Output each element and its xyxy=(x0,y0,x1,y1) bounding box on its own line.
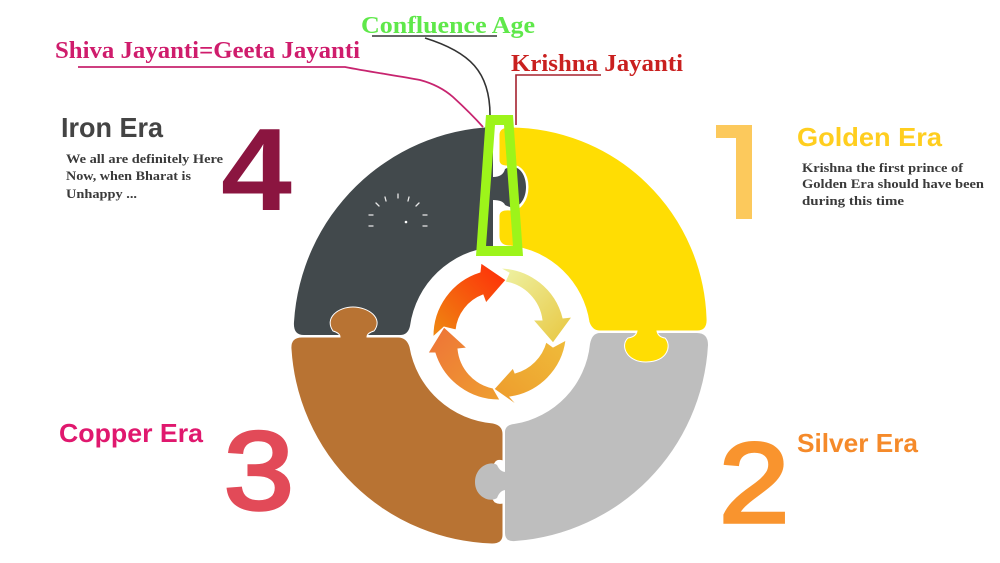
puzzle piece: Silver Era grey segment xyxy=(505,333,708,541)
text: Iron Era description xyxy=(66,151,223,201)
arrow: amber xyxy=(494,340,566,406)
arrow: pale yellow xyxy=(500,268,572,343)
heading: Golden Era: Golden Era xyxy=(797,122,943,152)
text: Golden Era description: Krishna the first prince of xyxy=(802,160,964,175)
text: Iron Era description: Now, when Bharat is xyxy=(66,168,191,183)
heading: Silver Era: Silver Era xyxy=(797,428,919,458)
leader line: Shiva Jayanti xyxy=(78,67,483,127)
number 1 xyxy=(716,125,752,219)
puzzle piece: Copper Era brown segment xyxy=(291,307,503,544)
label: Confluence Age: Confluence Age xyxy=(361,13,535,39)
number 4: 4 xyxy=(221,104,292,235)
label: Shiva Jayanti: Shiva Jayanti=Geeta Jayanti xyxy=(55,38,360,64)
cycle arrows ring xyxy=(428,263,572,406)
text: Golden Era description xyxy=(802,160,985,208)
heading: Iron Era: Iron Era xyxy=(61,112,163,143)
text: Iron Era description: Unhappy ... xyxy=(66,186,137,201)
puzzle tab: grey tab into brown segment xyxy=(475,463,506,500)
heading: Copper Era: Copper Era xyxy=(59,418,204,448)
icon: small sundial dashes on dark segment xyxy=(369,194,427,226)
number 3: 3 xyxy=(224,409,294,532)
leader line: Confluence Age xyxy=(372,36,497,115)
confluence frame: green trapezoid xyxy=(476,115,523,256)
leader line: Krishna Jayanti xyxy=(516,75,601,125)
text: Golden Era description: during this time xyxy=(802,193,904,208)
text: Iron Era description: We all are definitely Here xyxy=(66,151,223,166)
number 1: 1 xyxy=(705,113,771,245)
arrow: orange xyxy=(428,327,500,400)
number 2: 2 xyxy=(719,420,789,546)
puzzle piece: Golden Era yellow segment xyxy=(499,127,707,362)
text: Golden Era description: Golden Era should have been xyxy=(802,176,985,191)
puzzle piece: Iron Era dark segment xyxy=(294,127,526,335)
arrow: red xyxy=(433,263,506,337)
label: Krishna Jayanti: Krishna Jayanti xyxy=(511,51,683,77)
